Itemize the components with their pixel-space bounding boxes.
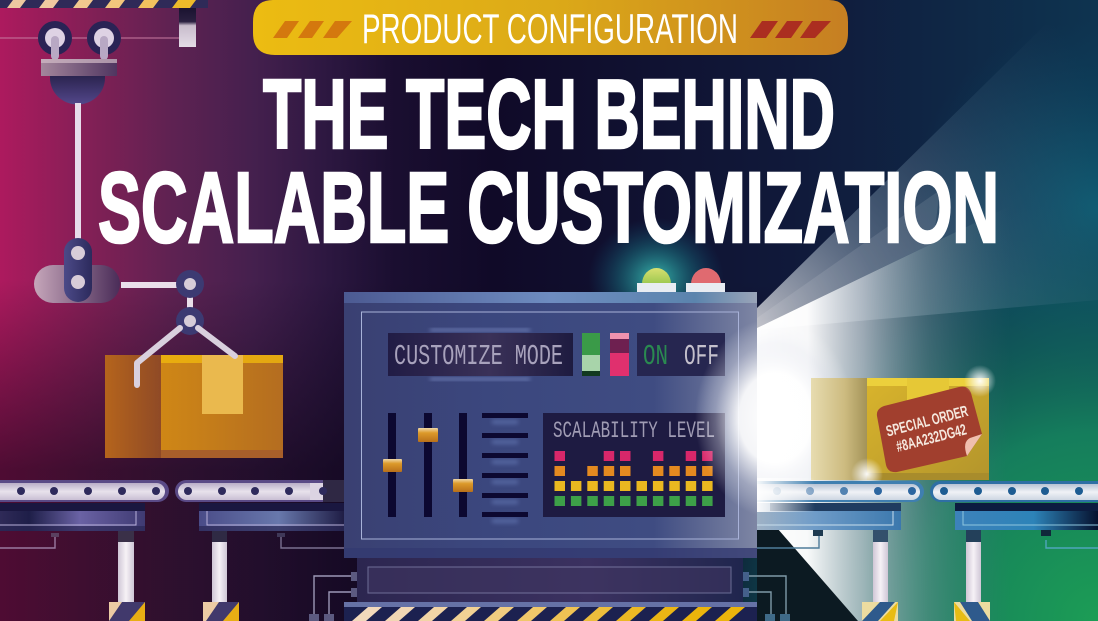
customize mode display	[388, 328, 573, 381]
right package	[811, 365, 996, 490]
banner text: PRODUCT CONFIGURATION	[362, 5, 738, 52]
sliders	[383, 413, 473, 517]
green toggle	[582, 333, 600, 376]
hazard stripe base	[344, 602, 757, 621]
machine base	[351, 558, 749, 602]
control panel	[344, 292, 757, 558]
panel light flare	[670, 300, 866, 530]
robot arm elbow	[34, 238, 120, 303]
robot arm link and joints	[121, 270, 204, 335]
right conveyors	[757, 478, 1098, 621]
indicator lights	[588, 218, 725, 338]
banner stripes right	[750, 21, 831, 38]
top hazard rail	[0, 0, 208, 8]
on off display	[637, 333, 725, 376]
special order label	[877, 387, 982, 472]
scalability level display	[543, 413, 725, 517]
special order label: #8AA232DG42	[895, 421, 968, 456]
customize mode display: CUSTOMIZE MODE	[394, 340, 563, 373]
category banner	[253, 0, 848, 55]
title	[98, 59, 999, 264]
left package	[105, 355, 283, 458]
gripper claw	[137, 328, 235, 385]
scalability level display: SCALABILITY LEVEL	[553, 418, 715, 444]
on off display: OFF	[684, 340, 719, 373]
banner stripes left	[273, 21, 352, 38]
on off display: ON	[643, 340, 668, 373]
rail hanger	[179, 8, 196, 47]
left conveyors	[0, 480, 345, 621]
robot arm rod	[75, 103, 81, 240]
light beam	[757, 25, 1098, 621]
pink toggle	[610, 333, 629, 376]
robot arm upper trolley	[38, 21, 121, 104]
level meter	[554, 451, 713, 506]
cable line	[0, 37, 179, 39]
special order label: SPECIAL ORDER	[884, 403, 970, 440]
base wiring	[309, 576, 790, 621]
speaker lines	[482, 413, 528, 523]
sparkles	[964, 365, 996, 397]
